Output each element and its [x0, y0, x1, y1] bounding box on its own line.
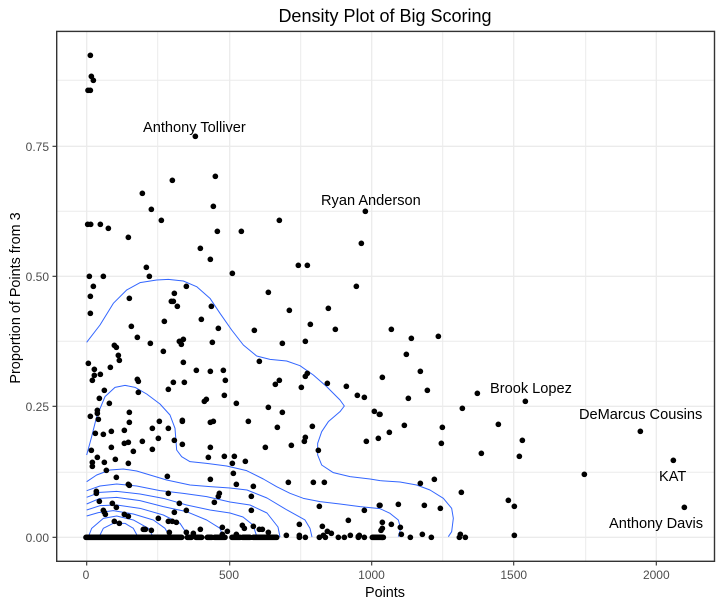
y axis tick labels	[26, 140, 49, 545]
y axis tick labels: 0.50	[26, 270, 49, 284]
density contour lines	[87, 279, 453, 537]
x axis tick labels: 1500	[500, 568, 527, 582]
x axis tick labels: 500	[219, 568, 239, 582]
x axis title: Points	[365, 585, 405, 601]
axis tick marks	[52, 146, 656, 566]
label: Anthony Tolliver: Anthony Tolliver	[143, 120, 246, 136]
label: DeMarcus Cousins: DeMarcus Cousins	[579, 407, 702, 423]
label: Brook Lopez: Brook Lopez	[490, 381, 572, 397]
title: Density Plot of Big Scoring	[278, 6, 492, 26]
x axis tick labels: 1000	[358, 568, 385, 582]
player name labels	[143, 120, 703, 532]
label: Anthony Davis: Anthony Davis	[609, 516, 703, 532]
y axis tick labels: 0.75	[26, 140, 49, 154]
scatter points	[86, 55, 684, 537]
label: Ryan Anderson: Ryan Anderson	[321, 193, 421, 209]
panel border	[57, 31, 714, 561]
x axis tick labels: 2000	[643, 568, 670, 582]
y axis tick labels: 0.00	[26, 531, 49, 545]
label: KAT: KAT	[659, 469, 686, 485]
y axis title: Proportion of Points from 3	[8, 212, 24, 384]
x axis tick labels	[83, 568, 670, 582]
x axis tick labels: 0	[83, 568, 90, 582]
y axis tick labels: 0.25	[26, 400, 49, 414]
